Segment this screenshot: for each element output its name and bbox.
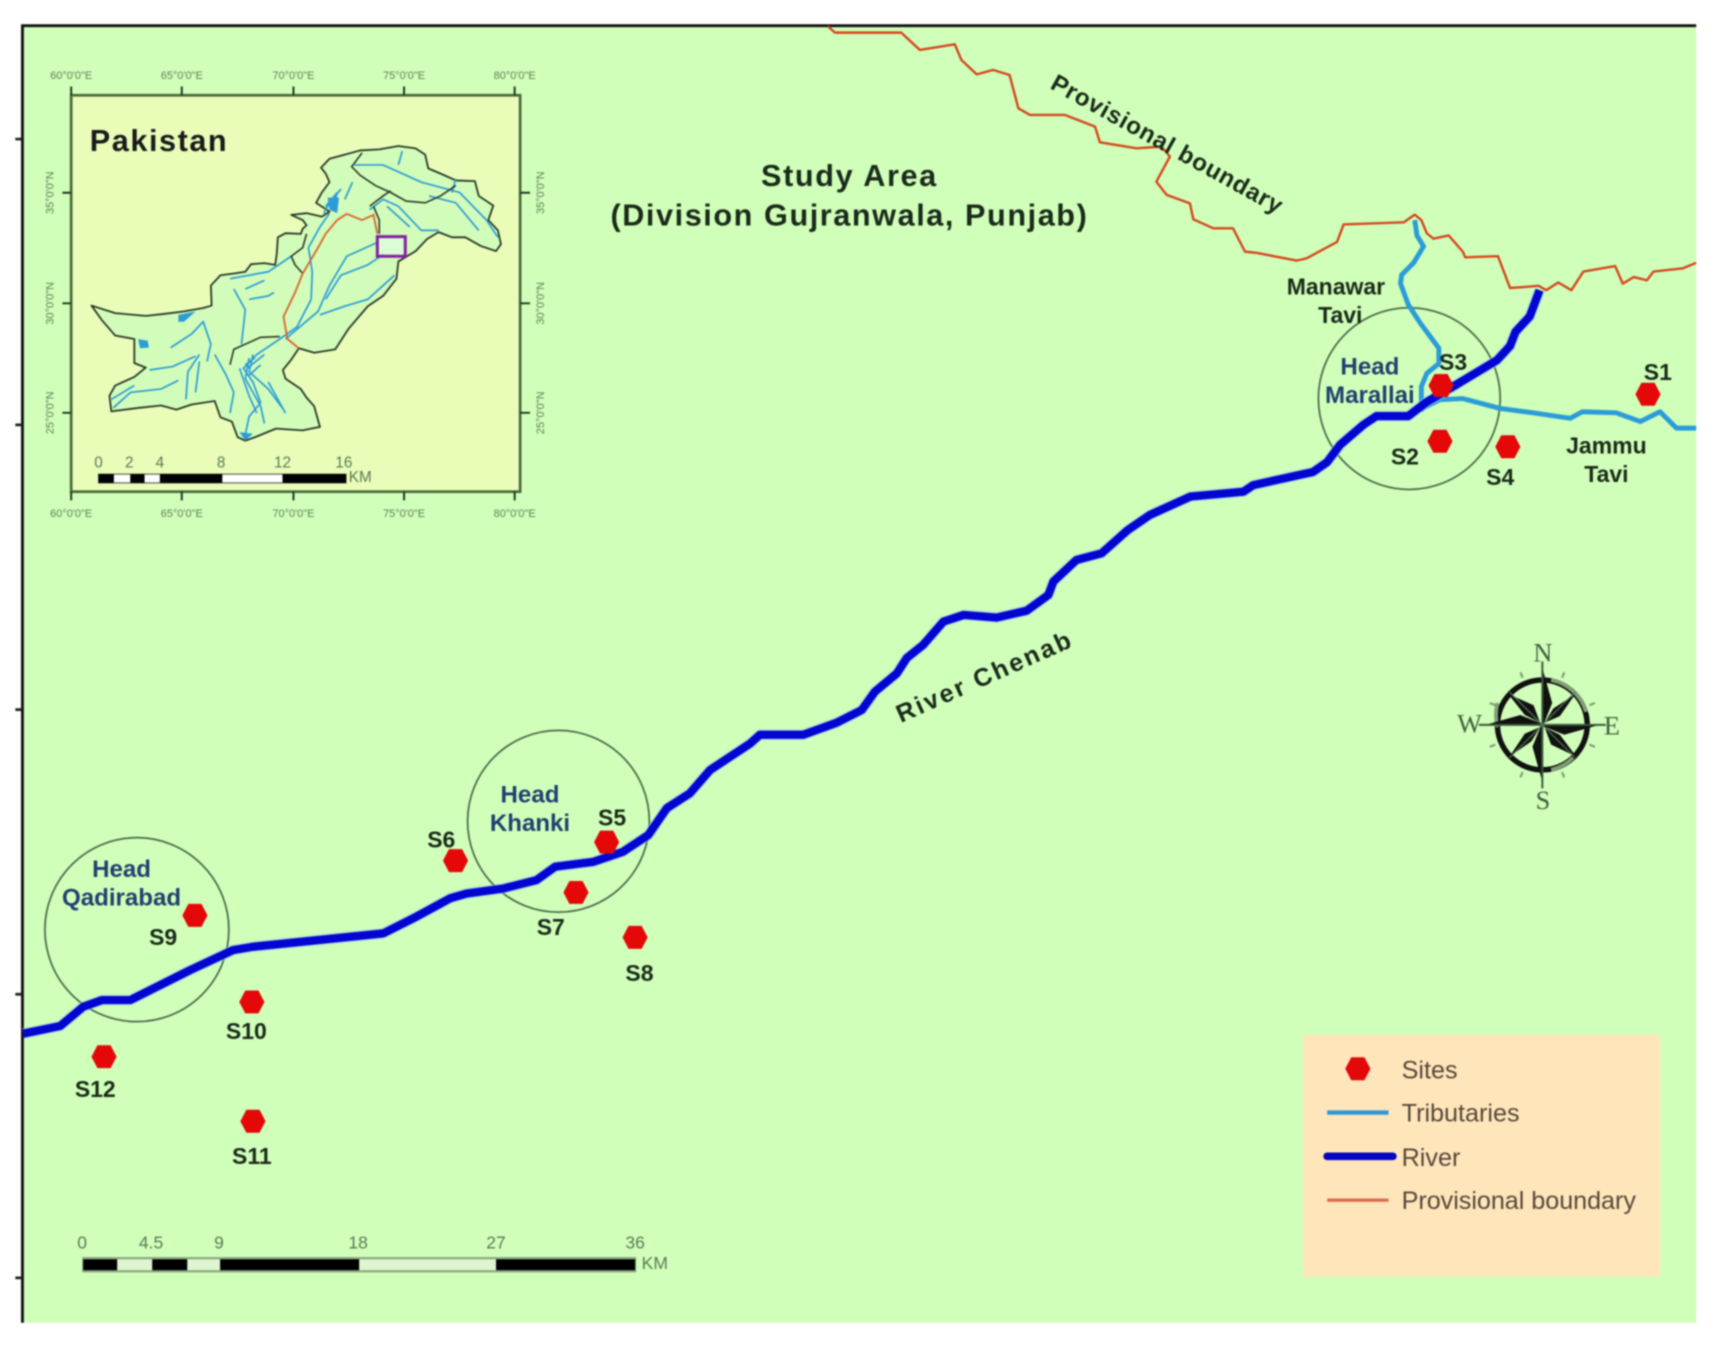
inset provincial boundary <box>284 214 377 348</box>
label: Head Marallai: Marallai <box>1325 382 1415 409</box>
legend item: river: River <box>1402 1144 1460 1172</box>
label: Head Khanki <box>490 782 570 837</box>
legend item: sites: Sites <box>1402 1057 1458 1085</box>
site labels: S9 <box>149 924 177 950</box>
compass letters: E <box>1604 712 1620 741</box>
label: Head Qadirabad: Qadirabad <box>62 885 181 912</box>
label: Head Marallai <box>1325 353 1415 409</box>
inset graticule labels: left and right: 30°0'0"N <box>45 282 57 325</box>
scale bar: main map <box>77 1232 668 1273</box>
tributary: Jammu Tavi <box>1420 399 1696 428</box>
label: Head Qadirabad <box>62 856 181 912</box>
scale bar: main map: 0 <box>77 1232 87 1252</box>
panel: Pakistan inset <box>45 70 547 520</box>
site labels <box>75 349 1672 1169</box>
inset lakes <box>138 198 339 441</box>
site labels: S11 <box>232 1143 272 1169</box>
scale bar: inset: 0 <box>94 455 103 472</box>
compass letters <box>1457 638 1620 815</box>
label: Manawar Tavi: Tavi <box>1318 302 1362 328</box>
scale bar: main map: 4.5 <box>139 1232 163 1252</box>
scale bar: inset: 4 <box>156 455 165 472</box>
site labels: S5 <box>598 805 626 831</box>
inset graticule labels: bottom <box>50 508 536 520</box>
circle: Head Khanki <box>468 730 649 912</box>
inset graticule labels: top <box>50 70 536 82</box>
scale bar: inset: 16 <box>335 455 352 472</box>
inset graticule labels: bottom: 75°0'0"E <box>383 508 425 520</box>
scale bar: inset: 2 <box>125 455 133 472</box>
scale bar: inset: KM <box>349 469 372 486</box>
Pakistan outline <box>91 146 501 441</box>
site labels: S3 <box>1439 349 1467 375</box>
site labels: S4 <box>1486 464 1514 490</box>
inset rivers <box>111 151 498 434</box>
inset graticule labels: left and right: 25°0'0"N <box>535 392 547 434</box>
map of Pakistan <box>91 146 501 441</box>
compass letters: S <box>1536 786 1550 815</box>
scale bar: main map: 36 <box>625 1232 645 1252</box>
legend item: sites <box>1345 1057 1458 1085</box>
site labels: S10 <box>226 1018 267 1044</box>
label: Manawar Tavi <box>1287 274 1385 328</box>
inset graticule labels: bottom: 60°0'0"E <box>50 508 92 520</box>
label: Head Khanki: Head <box>501 782 559 809</box>
title: study area <box>610 159 1087 233</box>
inset graticule labels: top: 60°0'0"E <box>50 70 92 82</box>
tributary: Manawar Tavi <box>1401 220 1439 412</box>
sites: red hexagon markers <box>91 374 1661 1133</box>
inset graticule labels: bottom: 80°0'0"E <box>494 508 536 520</box>
inset graticule labels: left and right: 35°0'0"N <box>535 171 547 214</box>
site labels: S1 <box>1644 359 1672 385</box>
inset graticule labels: top: 70°0'0"E <box>272 70 314 82</box>
inset graticule labels: bottom: 70°0'0"E <box>272 508 314 520</box>
inset graticule labels: bottom: 65°0'0"E <box>161 508 203 520</box>
river: Chenab <box>23 290 1540 1034</box>
legend item: tributaries: Tributaries <box>1402 1099 1520 1127</box>
inset graticule labels: left and right: 25°0'0"N <box>45 392 57 434</box>
inset graticule labels: left and right <box>45 171 547 434</box>
inset study area box <box>377 237 405 256</box>
inset title: Pakistan <box>90 124 227 158</box>
compass letters: W <box>1457 710 1482 739</box>
inset graticule labels: top: 75°0'0"E <box>383 70 425 82</box>
scale bar: main map: KM <box>642 1253 668 1273</box>
site labels: S12 <box>75 1076 116 1102</box>
circle: Head Marallai <box>1318 308 1500 489</box>
site labels: S7 <box>537 914 565 940</box>
inset graticule labels: left and right: 35°0'0"N <box>45 171 57 214</box>
label: provisional boundary: Provisional boundary <box>1046 70 1288 220</box>
legend item: provisional boundary: Provisional boundary <box>1402 1187 1636 1215</box>
label: Jammu Tavi: Tavi <box>1584 461 1629 487</box>
title: study area: Study Area <box>761 159 937 193</box>
scale bar: main map: 27 <box>486 1232 506 1252</box>
inset graticule labels: left and right: 30°0'0"N <box>535 282 547 325</box>
inset graticule labels: top: 65°0'0"E <box>161 70 203 82</box>
site labels: S6 <box>427 827 455 853</box>
label: Head Marallai: Head <box>1340 353 1399 380</box>
label: Head Qadirabad: Head <box>92 856 151 883</box>
label: River Chenab: River Chenab <box>892 626 1075 729</box>
scale bar: inset: 8 <box>217 455 225 472</box>
compass letters: N <box>1533 638 1552 667</box>
site labels: S8 <box>625 960 654 986</box>
site labels: S2 <box>1391 443 1419 469</box>
icon: compass rose <box>1479 661 1606 788</box>
panel: legend <box>1303 1035 1660 1277</box>
provisional boundary line <box>828 26 1696 290</box>
inset graticule labels: top: 80°0'0"E <box>494 70 536 82</box>
legend item: river <box>1327 1144 1460 1172</box>
label: Manawar Tavi: Manawar <box>1287 274 1385 300</box>
label: Jammu Tavi <box>1566 432 1647 487</box>
scale bar: inset: 12 <box>274 455 291 472</box>
circle: Head Qadirabad <box>45 838 229 1022</box>
label: Head Khanki: Khanki <box>490 810 570 837</box>
scale bar: main map: 18 <box>348 1232 368 1252</box>
inset internal boundaries <box>230 153 456 365</box>
title: study area: (Division Gujranwala, Punjab) <box>610 199 1087 233</box>
scale bar: main map: 9 <box>214 1232 224 1252</box>
label: Jammu Tavi: Jammu <box>1566 432 1647 458</box>
scale bar: inset <box>94 455 372 486</box>
